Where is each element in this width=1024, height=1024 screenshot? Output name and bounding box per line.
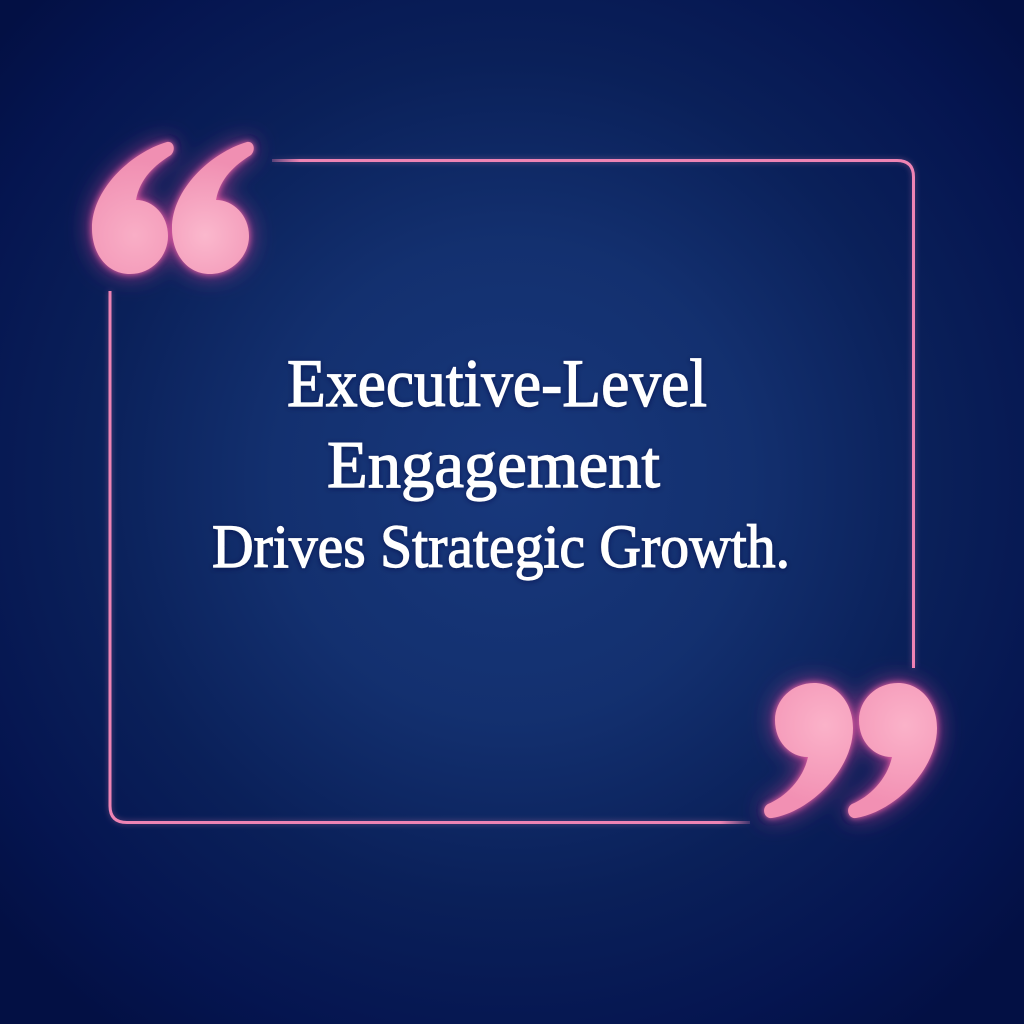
quote frame [110, 160, 914, 822]
quote text [212, 345, 790, 581]
icon: opening quotation mark [92, 142, 254, 274]
quote text: Executive-Level [287, 345, 707, 421]
quote text: Engagement [327, 428, 660, 502]
quote text: Drives Strategic Growth. [212, 514, 790, 581]
icon: closing quotation mark [764, 683, 937, 818]
